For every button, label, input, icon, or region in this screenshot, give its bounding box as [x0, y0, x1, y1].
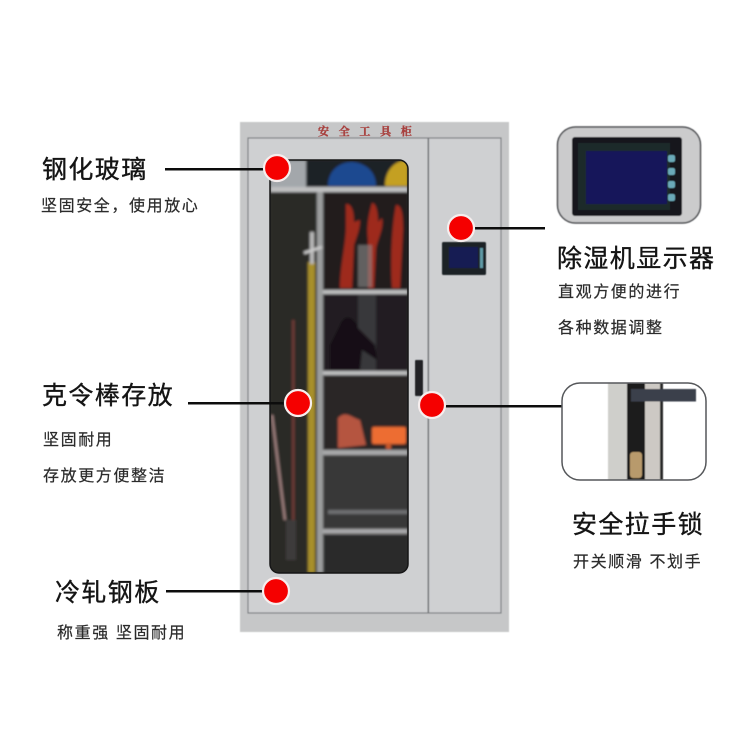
label: rod storage: 存放更方便整洁	[43, 467, 166, 485]
cabinet title: 安全工具柜	[318, 124, 422, 138]
yellow insulating rod	[308, 262, 315, 573]
leader lines	[165, 168, 562, 592]
door divider	[428, 138, 429, 613]
door panels	[248, 138, 501, 613]
inset: safety handle lock	[562, 383, 706, 480]
label: rod storage: 克令棒存放	[42, 382, 174, 410]
label: tempered glass: 坚固安全，使用放心	[41, 197, 199, 215]
red rods	[292, 320, 294, 530]
door handle	[415, 360, 423, 396]
label: rod storage: 坚固耐用	[43, 431, 113, 449]
marker dots	[263, 155, 474, 604]
label: dehumidifier display: 直观方便的进行	[558, 283, 681, 301]
inset: dehumidifier display	[558, 127, 700, 223]
glass window	[270, 160, 408, 573]
label: safety handle lock: 开关顺滑 不划手	[573, 553, 702, 571]
shelves	[270, 187, 408, 573]
cabinet body	[240, 122, 509, 632]
label: rod storage	[42, 382, 174, 485]
small control screen	[442, 242, 486, 275]
label: dehumidifier display: 各种数据调整	[558, 319, 664, 337]
label: safety handle lock: 安全拉手锁	[572, 511, 704, 539]
label: dehumidifier display	[557, 245, 715, 337]
dark clothing reflection	[330, 318, 377, 371]
left rack background	[270, 192, 317, 573]
red insulating gloves	[340, 203, 403, 288]
label: dehumidifier display: 除湿机显示器	[557, 245, 715, 273]
label: safety handle lock	[572, 511, 704, 571]
label: cold rolled steel: 称重强 坚固耐用	[57, 624, 186, 642]
label: tempered glass	[41, 156, 199, 215]
cabinet	[240, 122, 509, 632]
label: cold rolled steel: 冷轧钢板	[55, 579, 161, 607]
right compartments	[323, 192, 408, 290]
window frame	[270, 160, 408, 573]
upper compartment with helmets	[270, 160, 408, 188]
label: cold rolled steel	[55, 579, 186, 642]
label: tempered glass: 钢化玻璃	[42, 156, 148, 184]
orange equipment	[372, 427, 406, 444]
